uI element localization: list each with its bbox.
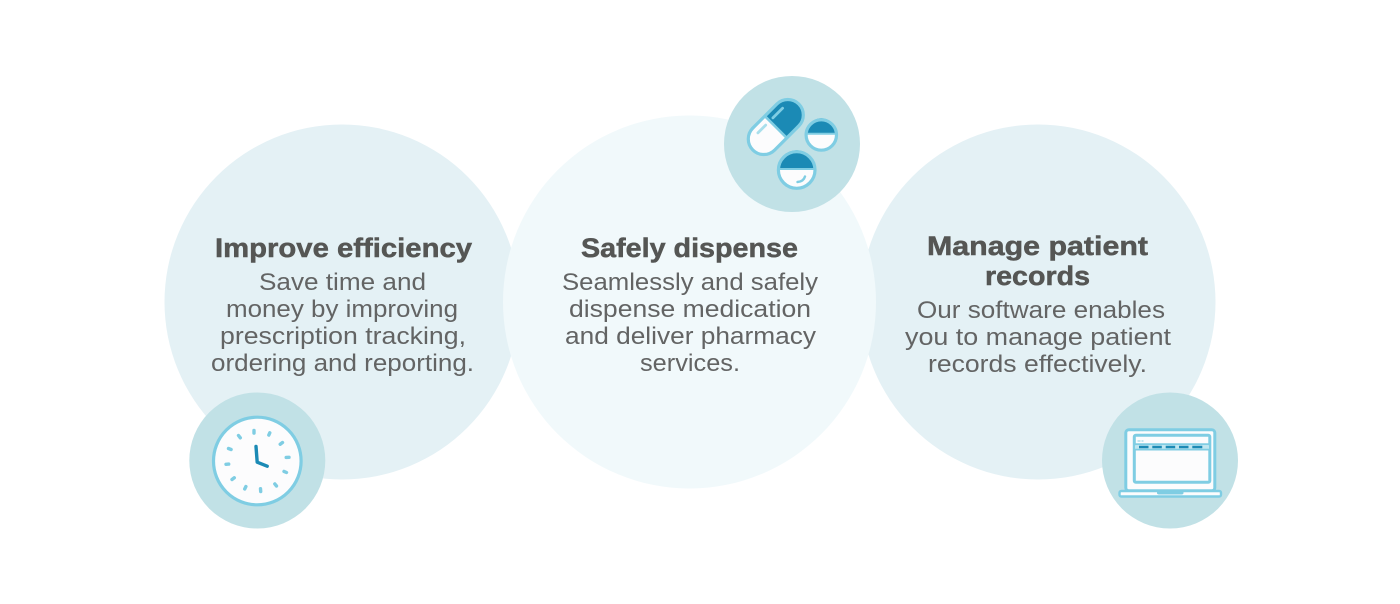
body text: manage patient records: Our software enables bbox=[917, 297, 1165, 324]
body text: improve efficiency: ordering and reporting. bbox=[211, 350, 474, 377]
body text: improve efficiency: prescription tracking, bbox=[220, 323, 466, 350]
body text: improve efficiency bbox=[211, 269, 474, 377]
pill small bbox=[806, 118, 837, 150]
text block: improve efficiency bbox=[211, 233, 474, 377]
body text: manage patient records: you to manage patient bbox=[905, 324, 1171, 351]
heading: manage patient records: records bbox=[985, 261, 1090, 291]
body text: manage patient records bbox=[905, 297, 1171, 378]
heading: manage patient records: Manage patient bbox=[927, 231, 1148, 261]
body text: improve efficiency: money by improving bbox=[226, 296, 458, 323]
heading: manage patient records bbox=[927, 231, 1148, 291]
body text: improve efficiency: Save time and bbox=[259, 269, 426, 296]
body text: safely dispense: Seamlessly and safely bbox=[562, 269, 818, 296]
body text: safely dispense: dispense medication bbox=[569, 296, 811, 323]
capsule bbox=[742, 93, 810, 161]
pill large bbox=[778, 150, 815, 188]
heading: improve efficiency: Improve efficiency bbox=[215, 233, 472, 263]
icon: clock bbox=[189, 392, 325, 528]
panel: manage patient records circle bbox=[860, 124, 1216, 480]
panel: safely dispense circle bbox=[503, 116, 876, 488]
body text: safely dispense: services. bbox=[640, 350, 740, 377]
body text: safely dispense bbox=[562, 269, 818, 377]
icon: laptop bbox=[1102, 392, 1238, 528]
body text: manage patient records: records effectively. bbox=[928, 351, 1147, 378]
text block: manage patient records bbox=[905, 231, 1171, 378]
body text: safely dispense: and deliver pharmacy bbox=[565, 323, 816, 350]
panel: improve efficiency circle bbox=[164, 124, 520, 480]
heading: safely dispense: Safely dispense bbox=[581, 233, 798, 263]
icon: pills bbox=[724, 76, 860, 212]
text block: safely dispense bbox=[562, 233, 818, 377]
